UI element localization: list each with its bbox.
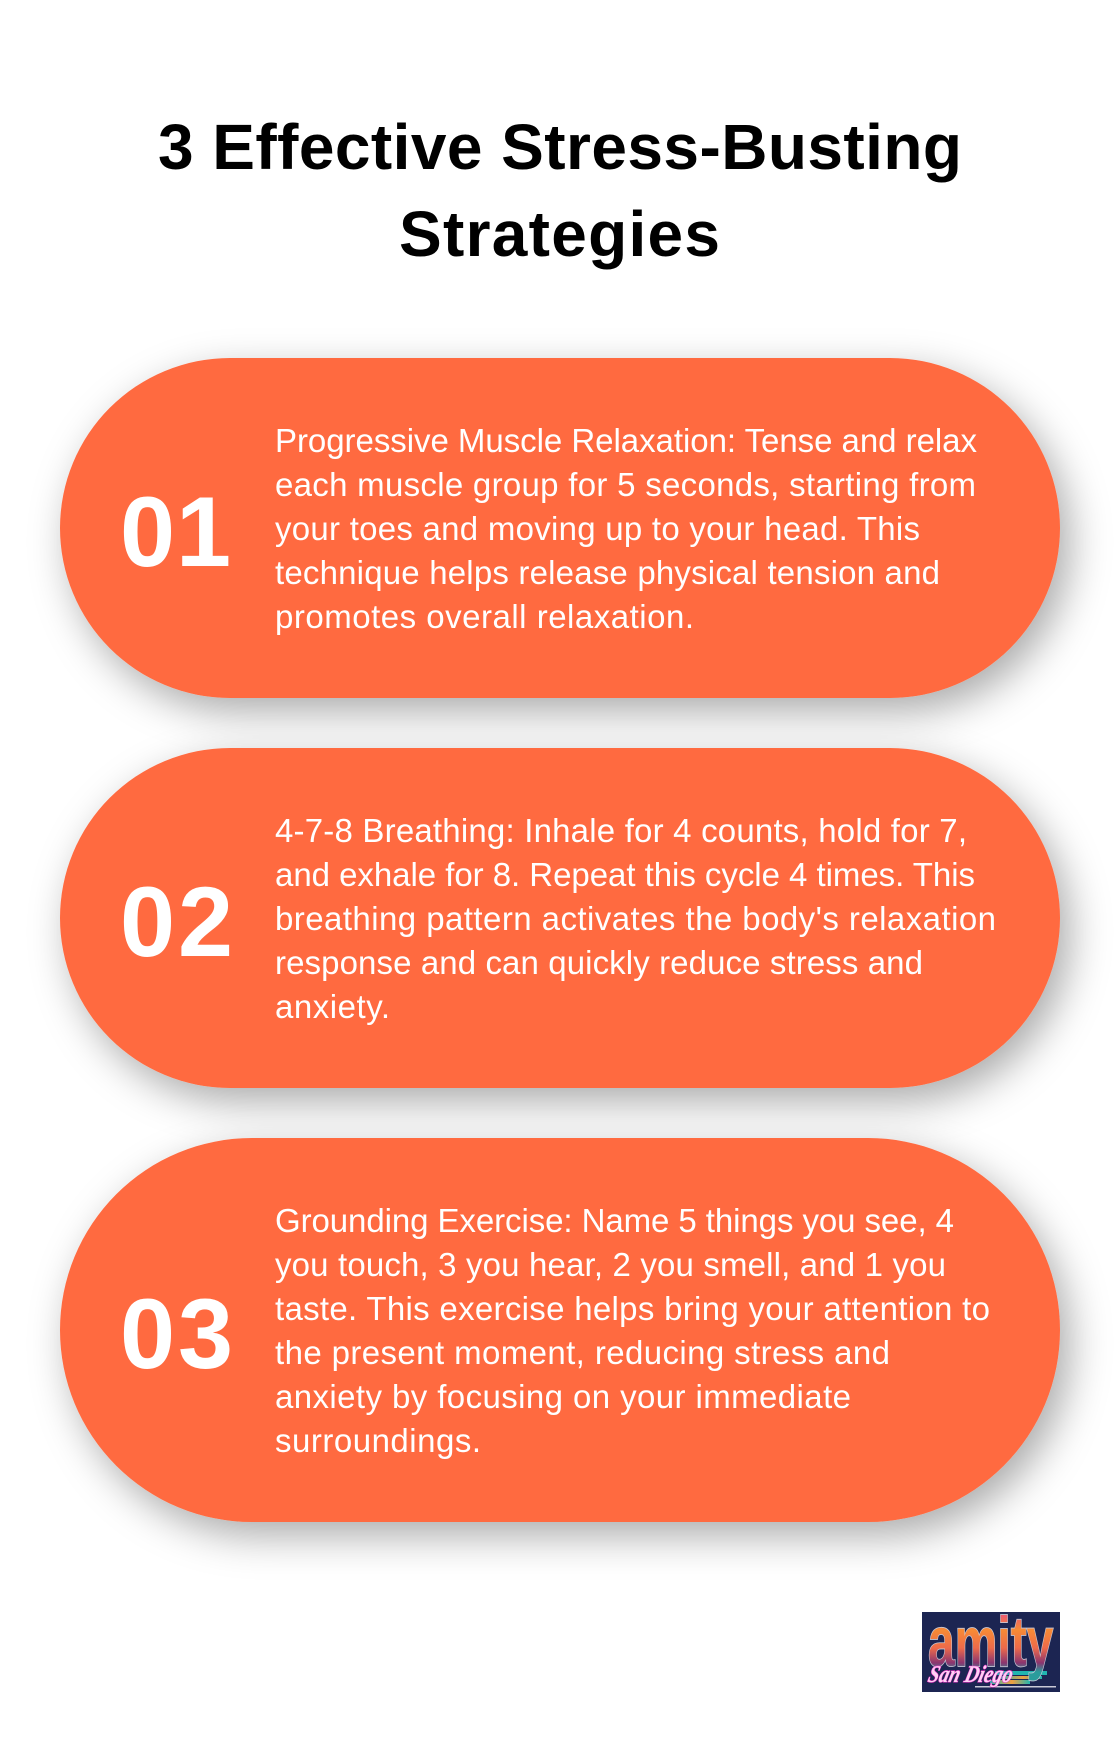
text: progressive muscle relaxation xyxy=(275,422,978,635)
panel: strategy 03 xyxy=(60,1138,1060,1522)
text: 4-7-8 breathing: anxiety. xyxy=(275,988,390,1025)
panel: strategy 01 xyxy=(60,358,1060,698)
text: progressive muscle relaxation: technique helps release physical tension and xyxy=(275,554,940,591)
text: 4-7-8 breathing: 4-7-8 Breathing: Inhale for 4 counts, hold for 7, xyxy=(275,812,967,849)
text: progressive muscle relaxation: your toes and moving up to your head. This xyxy=(275,510,920,547)
text: grounding exercise: anxiety by focusing on your immediate xyxy=(275,1378,851,1415)
number 01: 01 xyxy=(120,476,231,587)
logo: Amity San Diego xyxy=(922,1612,1060,1692)
logo beach band xyxy=(975,1671,1056,1688)
text: grounding exercise: Grounding Exercise: Name 5 things you see, 4 xyxy=(275,1202,954,1239)
text: grounding exercise: the present moment, reducing stress and xyxy=(275,1334,890,1371)
text: grounding exercise: taste. This exercise helps bring your attention to xyxy=(275,1290,990,1327)
number 02: 02 xyxy=(120,866,233,977)
title xyxy=(158,111,962,270)
number 03: 03 xyxy=(120,1278,233,1389)
text: 4-7-8 breathing: response and can quickly reduce stress and xyxy=(275,944,923,981)
logo wordmark: amity xyxy=(928,1602,1054,1681)
text: progressive muscle relaxation: Progressive Muscle Relaxation: Tense and relax xyxy=(275,422,978,459)
panel: strategy 02 xyxy=(60,748,1060,1088)
title: Strategies xyxy=(399,198,720,270)
text: progressive muscle relaxation: each muscle group for 5 seconds, starting from xyxy=(275,466,976,503)
text: 4-7-8 breathing xyxy=(275,812,996,1025)
text: grounding exercise: surroundings. xyxy=(275,1422,481,1459)
text: grounding exercise: you touch, 3 you hear, 2 you smell, and 1 you xyxy=(275,1246,946,1283)
text: 4-7-8 breathing: and exhale for 8. Repeat this cycle 4 times. This xyxy=(275,856,975,893)
text: grounding exercise xyxy=(275,1202,990,1459)
text: progressive muscle relaxation: promotes overall relaxation. xyxy=(275,598,694,635)
title: 3 Effective Stress-Busting xyxy=(158,111,962,183)
text: 4-7-8 breathing: breathing pattern activates the body's relaxation xyxy=(275,900,996,937)
logo script: San Diego xyxy=(926,1661,1016,1688)
